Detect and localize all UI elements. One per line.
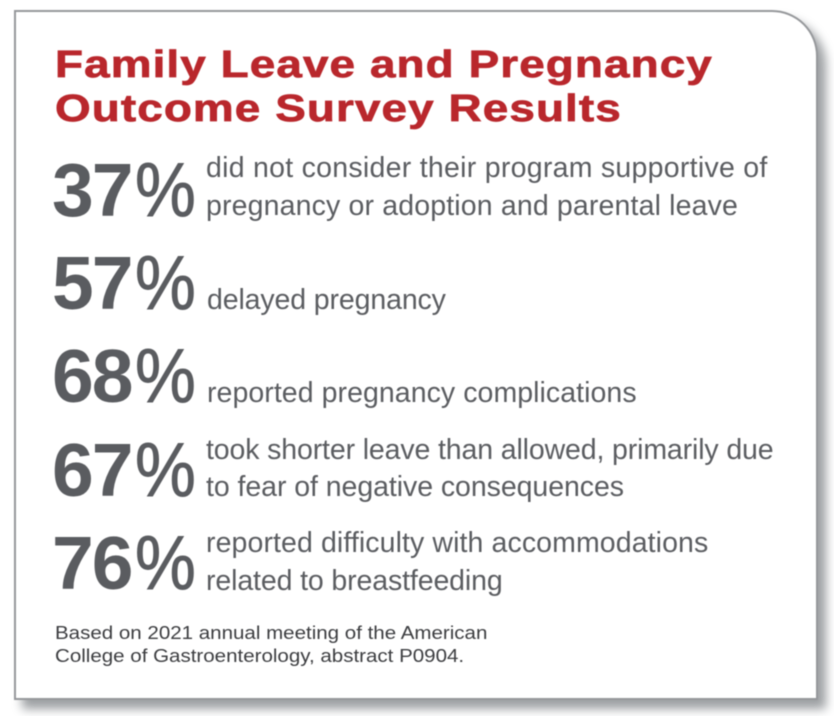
stat: 57%: delayed pregnancy [207,284,446,316]
source note: College of Gastroenterology, abstract P0904. [55,646,464,666]
stat: 67%: 67 [52,428,131,512]
stat: 37%: 37 [52,148,131,232]
source note [55,623,487,667]
stat: 57%: 57 [52,241,131,325]
stat: 67%: % [135,428,196,513]
stat: 76%: related to breastfeeding [206,565,503,597]
stat: 76%: 76 [52,521,131,605]
stat: 37%: % [135,148,196,233]
stat: 68% [52,334,637,419]
stat: 67%: took shorter leave than allowed, primarily due [206,434,774,466]
stat: 76%: % [135,521,196,606]
stat: 37% [52,148,768,233]
stat: 37%: did not consider their program supportive of [206,152,768,184]
stat: 76%: reported difficulty with accommodations [206,527,708,559]
stat: 68%: % [135,334,196,419]
stat: 37%: pregnancy or adoption and parental leave [206,190,738,222]
title: Family Leave and Pregnancy [55,44,713,86]
stat: 76% [52,521,708,606]
stat: 67%: to fear of negative consequences [206,471,624,503]
title [55,44,713,130]
stat: 68%: 68 [52,334,131,418]
stat: 57% [52,241,446,326]
stat: 68%: reported pregnancy complications [207,377,637,409]
stat: 67% [52,428,774,513]
stat: 57%: % [135,241,196,326]
title: Outcome Survey Results [55,88,622,130]
source note: Based on 2021 annual meeting of the American [55,623,487,643]
